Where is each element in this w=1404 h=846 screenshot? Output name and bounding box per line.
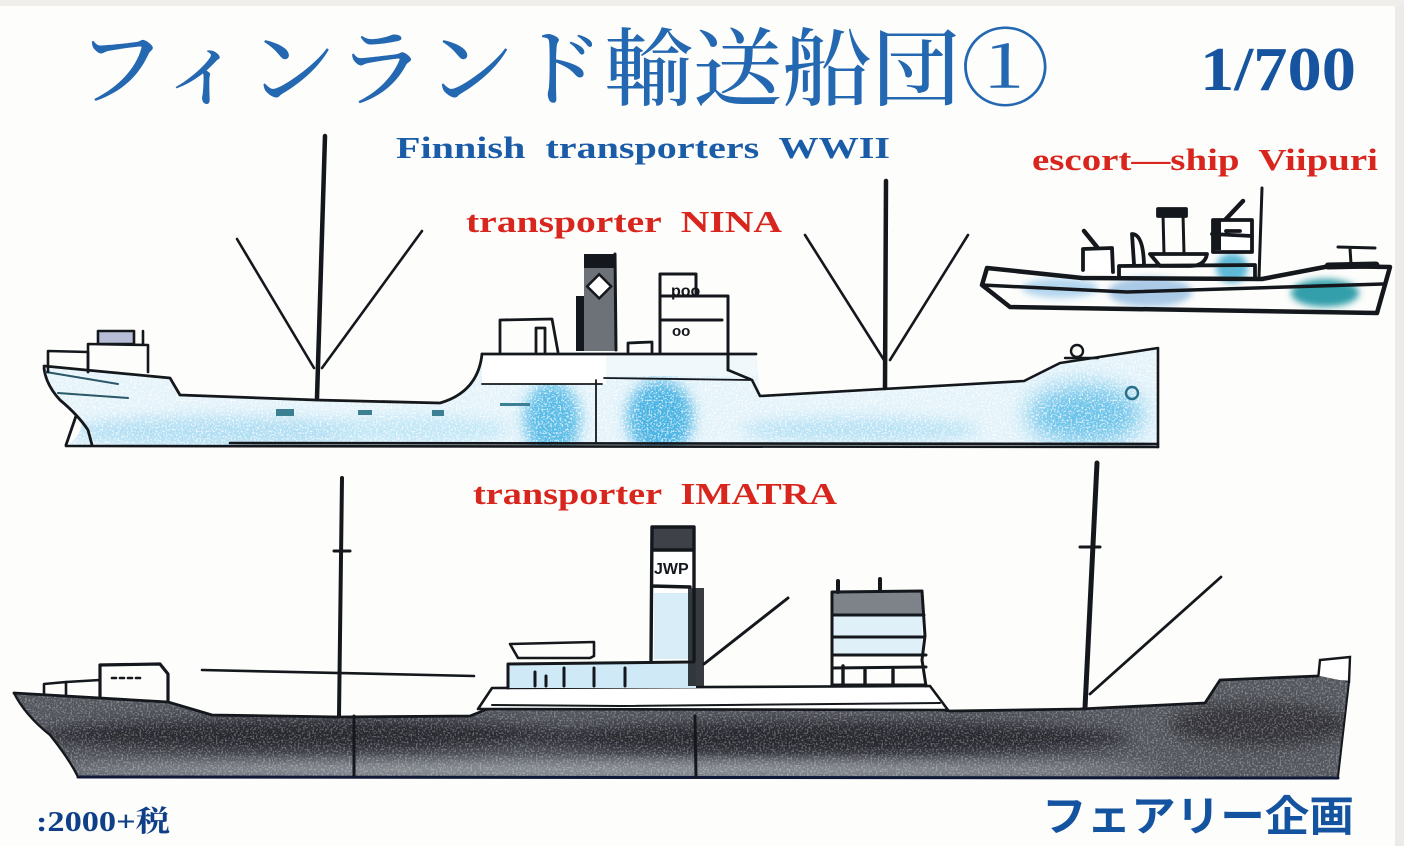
Nina funnel: [576, 254, 616, 351]
Nina hull camouflage: [46, 350, 1157, 446]
Viipuri deck structures: [1083, 188, 1376, 278]
Nina bridge: oo: [672, 323, 690, 340]
Imatra funnel: [651, 527, 704, 686]
label: escort ship: escort—ship Viipuri: [1032, 142, 1378, 177]
Nina stern detail: [1065, 345, 1138, 399]
Nina port marks: [276, 403, 530, 416]
Imatra stern box: [1318, 657, 1350, 682]
Imatra lifeboat deck: [508, 642, 696, 688]
maker name: フェアリー企画: [1042, 783, 1354, 844]
Nina hull outline: [44, 348, 1158, 447]
ship: transporter Imatra: [10, 463, 1355, 780]
label: transporter Nina: transporter NINA: [466, 204, 783, 239]
Imatra midship white deck: [478, 686, 948, 710]
Nina forecastle cabin: [48, 331, 148, 372]
title: フィンランド輸送船団①: [76, 2, 1050, 124]
ship: transporter Nina: [40, 136, 1160, 458]
Imatra funnel: JWP: [654, 561, 689, 578]
label: transporter Imatra: transporter IMATRA: [473, 476, 838, 511]
scale label: 1/700: [1200, 36, 1356, 104]
Nina bridge: [660, 274, 728, 370]
Imatra hull outline: [14, 676, 1349, 778]
Imatra forecastle cabin: [44, 664, 168, 700]
Nina midship superstructure: [482, 319, 756, 354]
subtitle: Finnish transporters WWII: [396, 130, 890, 165]
Imatra masts and derricks: [202, 463, 1221, 716]
Imatra dark hull: [16, 676, 1348, 776]
Imatra bridge: [832, 579, 926, 686]
ship: escort Viipuri: [982, 188, 1390, 313]
Viipuri hull: [982, 266, 1390, 313]
Nina masts and derricks: [237, 136, 968, 398]
price: :2000+税: [36, 805, 170, 838]
Nina bridge: poo: [671, 283, 701, 300]
Viipuri camouflage: [1022, 253, 1359, 307]
